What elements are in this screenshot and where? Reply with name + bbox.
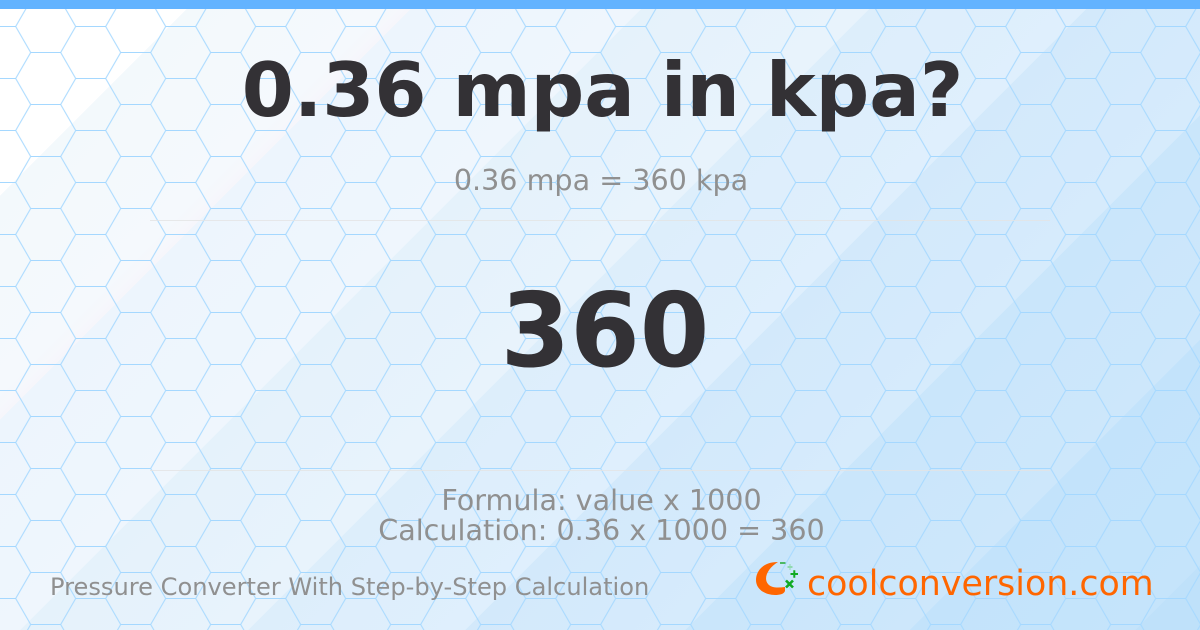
- tagline: Pressure Converter With Step-by-Step Calculation: [50, 573, 649, 601]
- formula and calculation: Calculation: 0.36 x 1000 = 360: [378, 513, 825, 547]
- icon: coolconversion logo: [756, 562, 798, 595]
- brand name: coolconversion.com: [807, 564, 1154, 604]
- formula and calculation: [378, 483, 825, 547]
- title: 0.36 mpa in kpa?: [242, 46, 963, 134]
- subtitle: conversion result: 0.36 mpa = 360 kpa: [454, 163, 748, 197]
- main result number: 360: [501, 270, 709, 391]
- formula and calculation: Formula: value x 1000: [441, 483, 762, 517]
- top bar: [0, 0, 1200, 9]
